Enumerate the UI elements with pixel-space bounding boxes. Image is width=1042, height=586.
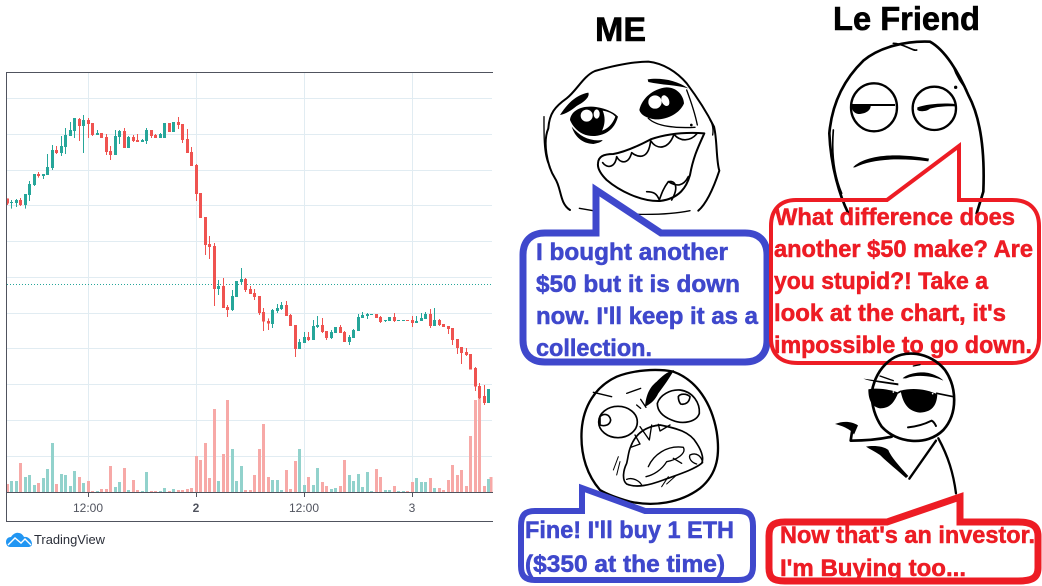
heading: Le Friend: Le Friend [833,0,980,37]
candles [8,115,488,405]
time axis labels [73,501,416,515]
TradingView logo [6,533,106,547]
TradingView logo: TradingView [34,533,106,547]
panel: candlestick price chart [6,72,493,522]
speech bubble: Le Friend second line: I'm Buying too... [780,555,966,582]
time axis labels: 12:00 [289,501,319,515]
speech bubble: Le Friend second line: Now that's an investor. [780,522,1035,549]
speech bubble: Le Friend first line: look at the chart, it's [774,300,1006,327]
speech bubble: ME second line [521,488,753,580]
speech bubble: ME first line [523,190,767,362]
speech bubble: ME first line: I bought another [536,239,728,266]
speech bubble: Le Friend second line [769,497,1038,582]
speech bubble: Le Friend first line [771,146,1039,363]
time axis labels: 3 [409,501,416,515]
speech bubble: ME second line: ($350 at the time) [525,551,725,578]
speech bubble: Le Friend first line: you stupid?! Take a [774,268,989,295]
speech bubble: ME first line: now. I'll keep it as a [536,303,759,330]
volume bars [8,398,491,492]
icon: unimpressed friend face [829,42,984,213]
speech bubble: ME first line: $50 but it is down [536,271,740,298]
current price dotted line [7,284,492,286]
icon: happy rage face [544,62,719,214]
icon: sunglasses stick figure [835,354,956,493]
speech bubble: ME first line: collection. [536,335,652,362]
speech bubble: Le Friend first line: What difference does [775,204,1015,231]
icon: blue cloud [6,533,32,547]
time axis labels: 2 [193,501,200,515]
time axis labels: 12:00 [73,501,103,515]
speech bubble: Le Friend first line: another $50 make? Are [774,236,1033,263]
speech bubble: Le Friend first line: impossible to go down. [774,332,1032,359]
heading: ME: ME [595,11,646,49]
speech bubble: ME second line: Fine! I'll buy 1 ETH [525,517,734,544]
chart frame and time axis [6,72,493,522]
icon: furious rage face [581,370,718,504]
